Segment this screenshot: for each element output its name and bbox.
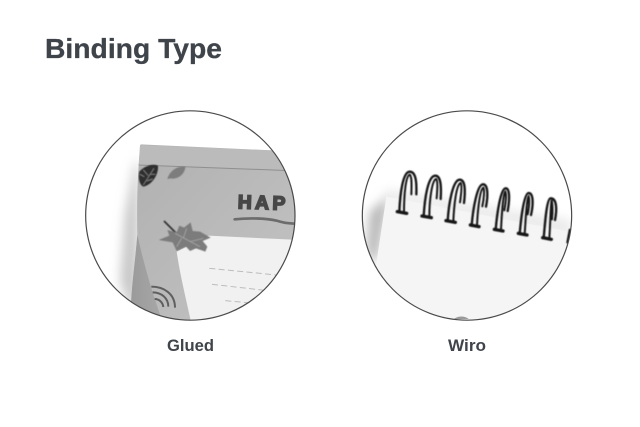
label: Wiro: Wiro — [448, 337, 486, 355]
notebook page — [377, 197, 566, 320]
coil 4 — [470, 184, 487, 227]
notepad cover — [131, 144, 300, 325]
title: Binding Type — [45, 33, 222, 64]
page bottom shade — [518, 265, 578, 325]
underline stroke — [235, 218, 297, 224]
dashed writing lines — [209, 268, 277, 305]
coil 2 — [422, 176, 441, 218]
circle outline — [362, 111, 572, 320]
coil 6 — [518, 193, 533, 235]
circle outline — [86, 111, 295, 320]
icon: maple leaf — [159, 221, 211, 252]
panel: wiro binding photo — [362, 111, 578, 325]
coil 5 — [494, 188, 509, 231]
writing card — [176, 236, 292, 320]
notepad fold — [131, 236, 160, 315]
coil 1 — [397, 172, 416, 213]
heading fragment on notepad: HAP — [237, 192, 289, 215]
coil 8 — [568, 230, 570, 242]
page shadow — [366, 195, 390, 265]
icon: dark leaf — [139, 165, 158, 187]
bottom edge mark — [454, 316, 469, 319]
glued strip — [138, 145, 178, 164]
icon: small leaf — [167, 167, 185, 179]
panel: glued binding photo — [86, 111, 300, 325]
paper shadow — [120, 162, 138, 308]
wire coils — [397, 172, 570, 242]
coil 3 — [446, 180, 465, 222]
label: Glued: Glued — [167, 337, 214, 355]
icon: rainbow arcs — [151, 287, 175, 308]
coil 7 — [543, 198, 556, 239]
